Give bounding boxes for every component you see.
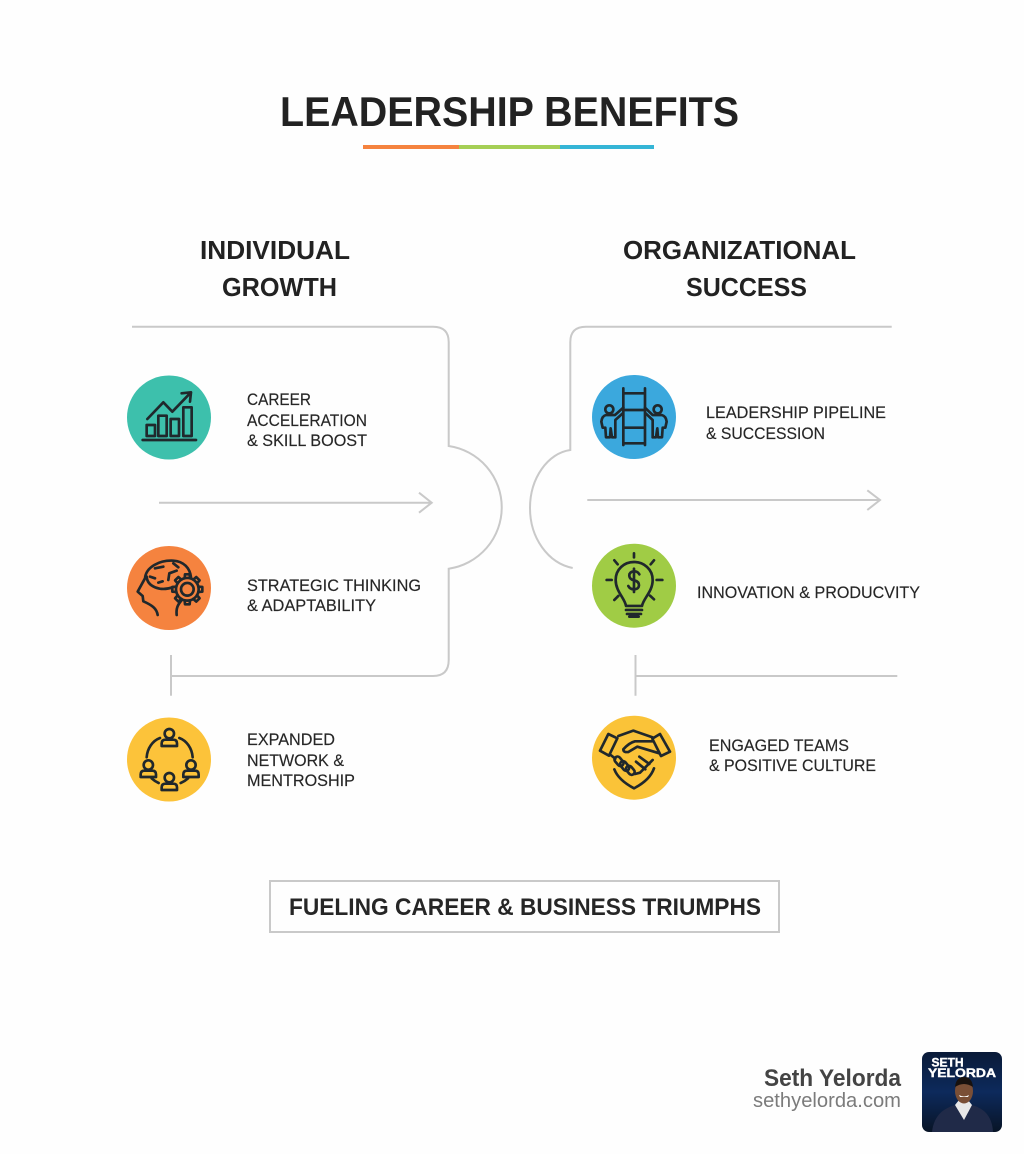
panel outline with bulge bbox=[132, 327, 502, 676]
icon: career chart bbox=[127, 376, 211, 460]
text: engaged teams: ENGAGED TEAMS bbox=[709, 737, 849, 755]
heading: individual growth: INDIVIDUAL bbox=[200, 235, 350, 265]
panel: organizational success bbox=[530, 235, 920, 800]
panel: individual growth bbox=[127, 235, 502, 802]
heading: organizational success bbox=[623, 235, 856, 302]
footer: avatar: SETH bbox=[932, 1056, 964, 1070]
footer: avatar bbox=[922, 1052, 1002, 1132]
text: engaged teams bbox=[709, 737, 876, 775]
icon: light bulb with dollar bbox=[592, 544, 676, 628]
callout: FUELING CAREER & BUSINESS TRIUMPHS bbox=[289, 894, 761, 921]
text: expanded network bbox=[247, 731, 355, 790]
heading: individual growth: GROWTH bbox=[222, 272, 337, 302]
panel outline with bulge bbox=[530, 327, 892, 568]
text: leadership pipeline: LEADERSHIP PIPELINE bbox=[706, 404, 886, 422]
text: expanded network: MENTROSHIP bbox=[247, 772, 355, 790]
footer: avatar: YELORDA bbox=[928, 1066, 996, 1080]
text: leadership pipeline: & SUCCESSION bbox=[706, 425, 825, 443]
heading: organizational success: SUCCESS bbox=[686, 272, 807, 302]
text: strategic thinking: STRATEGIC THINKING bbox=[247, 577, 421, 595]
text: engaged teams: & POSITIVE CULTURE bbox=[709, 757, 876, 775]
tick line bbox=[636, 655, 897, 696]
icon: handshake bbox=[592, 716, 676, 800]
text: strategic thinking: & ADAPTABILITY bbox=[247, 597, 376, 615]
title: LEADERSHIP BENEFITS bbox=[280, 88, 739, 135]
icon: ladder and people bbox=[592, 375, 676, 459]
text: leadership pipeline bbox=[706, 404, 886, 443]
heading: organizational success: ORGANIZATIONAL bbox=[623, 235, 856, 265]
text: expanded network: NETWORK & bbox=[247, 752, 344, 770]
footer: brand name bbox=[753, 1065, 902, 1112]
heading: individual growth bbox=[200, 235, 350, 302]
arrow: individual bbox=[159, 493, 432, 513]
footer: brand name: Seth Yelorda bbox=[764, 1065, 902, 1092]
icon: network circle bbox=[127, 718, 211, 802]
text: career acceleration: & SKILL BOOST bbox=[247, 432, 367, 450]
arrow: organizational bbox=[587, 490, 880, 510]
tick line bbox=[170, 655, 172, 696]
text: expanded network: EXPANDED bbox=[247, 731, 335, 749]
text: innovation: INNOVATION & PRODUCVITY bbox=[697, 584, 920, 602]
callout bbox=[270, 881, 779, 932]
footer: brand name: sethyelorda.com bbox=[753, 1090, 901, 1112]
text: strategic thinking bbox=[247, 577, 421, 615]
text: career acceleration: ACCELERATION bbox=[247, 412, 367, 430]
icon: brain with gear bbox=[127, 546, 211, 630]
text: career acceleration: CAREER bbox=[247, 391, 311, 409]
title underline bbox=[363, 145, 654, 149]
text: career acceleration bbox=[247, 391, 367, 450]
